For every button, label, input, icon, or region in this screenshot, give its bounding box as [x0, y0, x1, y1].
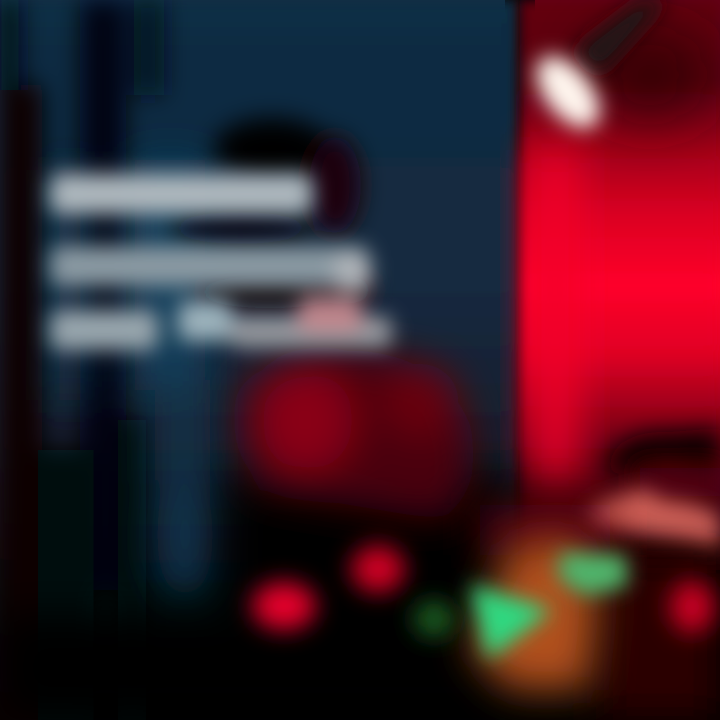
red column glow: [530, 150, 580, 480]
right figure: dark shape: [605, 428, 720, 496]
spotlight arm: [572, 0, 668, 75]
background: dark blue wall: [0, 0, 518, 720]
floor shadow: [0, 475, 530, 720]
floor: dark red sheen: [480, 505, 720, 720]
spotlight lamp: [524, 45, 612, 139]
red light: right: [670, 581, 714, 633]
red light: center: [351, 545, 405, 593]
dark shadow in the red wall's upper right: [590, 30, 710, 120]
figure: red sweater: [239, 350, 474, 520]
floor: orange glow: [470, 535, 600, 690]
right figure: pink shape: [585, 490, 720, 548]
green shape: upper right: [558, 552, 628, 596]
red light: left: [252, 582, 316, 630]
figure: dark hair: [170, 118, 373, 308]
green light: small dark: [414, 601, 454, 637]
title: three blurred lines of illegible text: [50, 174, 392, 350]
left dark column: [0, 0, 164, 720]
green shape: triangle: [470, 584, 552, 660]
background: red wall: [520, 0, 720, 570]
teal glow behind the title: [55, 160, 213, 600]
